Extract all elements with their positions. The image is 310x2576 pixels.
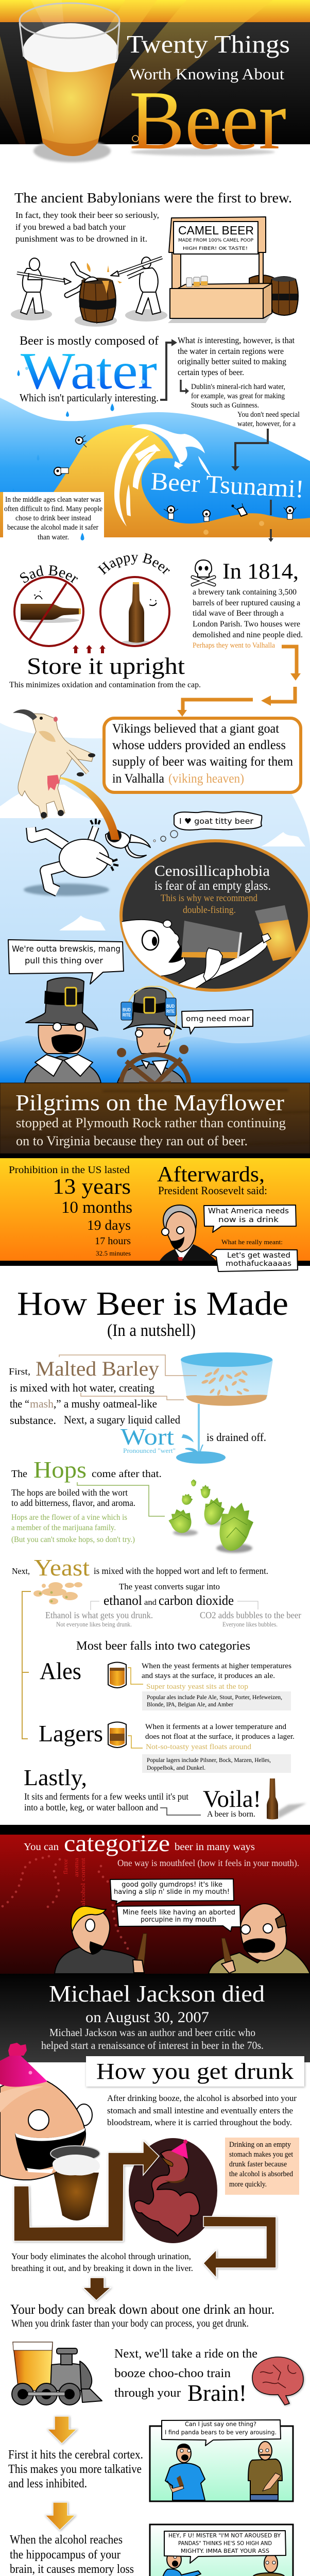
text: cerebral cortex: and less inhibited. xyxy=(8,2477,87,2490)
text: yeast intro: Yeast xyxy=(34,1554,90,1581)
icon: bottle xyxy=(267,1778,306,1820)
text block: Perhaps they went to Valhalla xyxy=(193,641,275,650)
icon: happy beer: Happy Beer xyxy=(98,553,170,575)
heading: You can xyxy=(24,1841,59,1853)
text: duration: 10 months xyxy=(61,1198,132,1217)
bald drinker xyxy=(209,1904,310,1974)
text: The xyxy=(11,1468,27,1480)
clouds xyxy=(0,785,305,930)
title: how beer is made xyxy=(17,1285,288,1340)
callout: empty stomach: Drinking on an empty xyxy=(229,2141,291,2149)
sign: CAMEL BEER xyxy=(178,224,254,237)
heading: categorize xyxy=(64,1830,170,1856)
text: duration: 17 hours xyxy=(95,1235,131,1247)
heading: ancient Babylonians: The ancient Babylonians were the first to brew. xyxy=(14,190,292,206)
callout: Vikings: in Valhalla xyxy=(112,772,164,786)
speech bubble xyxy=(211,1249,298,1272)
arrow xyxy=(181,380,189,394)
text: bloodstream, where it is carried throughout the body. xyxy=(107,2117,292,2127)
text xyxy=(9,1357,266,1454)
panel: Cenosillicaphobia xyxy=(116,841,309,992)
text block: Dublin: Stouts such as Guinness. xyxy=(191,401,259,410)
text xyxy=(11,2251,193,2273)
text: booze choo-choo train xyxy=(114,2367,231,2380)
text: Your body can break down about one drink an hour. xyxy=(10,2302,274,2317)
text: ethanol and CO2: Everyone likes bubbles. xyxy=(222,1620,278,1628)
header banner xyxy=(0,0,310,167)
text box: middle ages: than water. xyxy=(38,533,69,541)
wave foam xyxy=(114,424,211,527)
speech bubble: Can I just say one thing? xyxy=(185,2420,256,2428)
panel: booze train xyxy=(12,2342,303,2406)
swimmers xyxy=(54,435,296,521)
man in blue pointing xyxy=(160,2550,201,2576)
panel: lastly voila: It sits and ferments for a few weeks until it's put xyxy=(24,1791,188,1802)
panel: lastly voila: Lastly, xyxy=(24,1765,87,1790)
icon: skull xyxy=(193,560,214,585)
beer cans: RITE xyxy=(123,1012,131,1018)
callout: Vikings: (viking heaven) xyxy=(168,772,244,786)
rotated labels: aroma xyxy=(73,1857,80,1877)
ales: Super toasty yeast sits at the top xyxy=(146,1683,248,1691)
speech bubble: good golly gumdrops! it's like xyxy=(122,1880,222,1889)
speech bubble: moar xyxy=(182,1010,253,1034)
text: ethanol and CO2: and xyxy=(144,1598,157,1607)
panel: sky background xyxy=(0,709,310,1046)
text block: special water: You don't need special xyxy=(237,411,300,419)
text block: water regions: originally better suited to making xyxy=(178,357,286,366)
arrow: orange down xyxy=(45,2502,75,2530)
red arrows xyxy=(73,645,106,653)
text: After drinking booze, the alcohol is absorbed into your xyxy=(107,2093,297,2103)
icon: sad beer: Sad Beer xyxy=(20,565,78,583)
lagers: When it ferments at a lower temperature and xyxy=(145,1723,287,1731)
panel: categorize beer xyxy=(0,1825,310,1974)
ales xyxy=(40,1658,291,1710)
text: duration: 19 days xyxy=(87,1217,131,1233)
panel: Michael Jackson: on August 30, 2007 xyxy=(85,2009,209,2026)
speech bubble: mothafuckaaaas xyxy=(226,1260,291,1268)
text: mostly water: Beer is mostly composed of xyxy=(20,334,159,348)
text: ethanol and CO2: The yeast converts sugar into xyxy=(119,1582,220,1591)
text: yeast intro: Next, xyxy=(12,1566,30,1576)
text: come after that. xyxy=(92,1468,162,1480)
text: duration xyxy=(9,1164,132,1257)
text block: Dublin: for example, was great for making xyxy=(191,392,285,400)
text: yeast intro: is mixed with the hopped wort and left to ferment. xyxy=(94,1566,268,1576)
text xyxy=(107,2093,297,2127)
panel: Michael Jackson: Michael Jackson died xyxy=(49,1980,265,2007)
arrow xyxy=(231,429,268,471)
text: ethanol and CO2 xyxy=(45,1582,301,1628)
callout: empty stomach: the alcohol is absorbed xyxy=(229,2170,293,2178)
speech bubble: porcupine in my mouth xyxy=(141,1916,216,1924)
panel: Pilgrims on the Mayflower plank xyxy=(0,1083,310,1154)
lagers: Not-so-toasty yeast floats around xyxy=(146,1743,252,1751)
text: afterwards xyxy=(157,1163,267,1197)
text block: Dublin xyxy=(191,383,285,410)
panel: lastly voila: into a bottle, keg, or water balloon and xyxy=(24,1802,158,1812)
text: Next, a sugary liquid called xyxy=(64,1413,180,1426)
text xyxy=(10,2302,274,2329)
lagers: Lagers xyxy=(39,1720,103,1747)
text: (But you can't smoke hops, so don't try.) xyxy=(11,1535,135,1544)
illustration: drowning in a barrel xyxy=(11,257,167,327)
text block: London Parish. Two houses were xyxy=(193,620,300,629)
vat illustration xyxy=(176,1352,273,1464)
text: Malted Barley xyxy=(36,1357,159,1380)
text block xyxy=(193,588,303,650)
arrow: orange down xyxy=(47,2416,77,2444)
speech bubble: having a slip n' slide in my mouth! xyxy=(114,1888,230,1896)
heading: beer tsunami: Beer Tsunami! xyxy=(150,467,305,503)
dotted lines xyxy=(2,1855,129,1950)
text: mostly water: Water xyxy=(21,342,157,400)
arrow xyxy=(268,500,273,542)
beer cans: BUD xyxy=(123,1007,131,1012)
double-fisting drinker xyxy=(116,905,297,992)
speech bubble: I find panda bears to be very arousing. xyxy=(165,2429,277,2436)
text: The hops are boiled with the wort xyxy=(11,1487,128,1498)
panel: 1814 beer flood xyxy=(193,560,303,650)
text: ,” a mushy oatmeal-like xyxy=(54,1397,157,1410)
text: Hops xyxy=(33,1456,87,1483)
text: Wort xyxy=(120,1424,175,1450)
thought bubble: I ♥ goat titty beer xyxy=(179,817,254,826)
text box: middle ages: because the alcohol made it safer xyxy=(7,523,98,532)
speech bubble: HEY, F U! MISTER "I'M NOT AROUSED BY xyxy=(168,2533,281,2539)
heading: Store it upright xyxy=(27,653,185,679)
text: duration: 13 years xyxy=(53,1175,131,1199)
panel: lastly voila: Voila! xyxy=(203,1786,261,1812)
text: ethanol and CO2: ethanol xyxy=(104,1593,142,1608)
barrels xyxy=(249,275,298,315)
text box: middle ages xyxy=(3,492,104,541)
text: When you drink faster than your body can process, you get drunk. xyxy=(11,2318,249,2329)
lagers: does not float at the surface, it produces a lager. xyxy=(145,1733,295,1741)
blond drinker xyxy=(55,1906,147,1974)
text box: middle ages: often difficult to find. Many people xyxy=(4,505,102,513)
callout: empty stomach: stomach makes you get xyxy=(229,2150,294,2159)
text: hippocampus: brain, it causes memory loss xyxy=(10,2563,134,2576)
text block: special water: water, however, for a xyxy=(237,420,296,428)
text block: water regions: What is interesting, however, is that xyxy=(178,335,295,345)
speech bubble xyxy=(110,1879,234,1904)
speech bubble xyxy=(162,2420,281,2446)
rotated labels: alcohol content xyxy=(79,1857,87,1906)
heading xyxy=(24,1830,299,1869)
speech bubble xyxy=(164,2531,286,2563)
panel: Michael Jackson: Michael Jackson was an author and beer critic who xyxy=(49,2026,255,2039)
text: afterwards: President Roosevelt said: xyxy=(158,1184,267,1197)
speech bubble: now is a drink xyxy=(218,1216,279,1224)
text block: drowning punishment: if you brewed a bad batch your xyxy=(15,222,126,232)
text: through your xyxy=(114,2386,181,2400)
panel: prohibition xyxy=(0,1154,310,1272)
goat xyxy=(13,709,95,819)
title: Beer xyxy=(129,74,286,167)
viking xyxy=(24,819,150,896)
callout: empty stomach: drunk faster because xyxy=(229,2160,287,2168)
speech bubble: Let's get wasted xyxy=(227,1251,290,1260)
beer stream xyxy=(60,777,119,840)
text block: special water xyxy=(237,411,300,428)
panel: ocean and pilgrims xyxy=(0,939,310,1083)
text block: a brewery tank containing 3,500 xyxy=(193,588,297,597)
sign xyxy=(174,222,258,254)
panel: how you get drunk xyxy=(0,2043,304,2329)
sign: HIGH FIBER! OK TASTE! xyxy=(183,246,248,251)
ales: Ales xyxy=(40,1658,81,1685)
speech bubble: What America needs xyxy=(208,1207,289,1215)
text: ethanol and CO2: CO2 adds bubbles to the beer xyxy=(200,1610,301,1620)
title xyxy=(127,30,290,167)
callout: empty stomach: more quickly. xyxy=(229,2180,267,2189)
lagers: Doppelbok, and Dunkel. xyxy=(147,1764,205,1771)
icon: pint of beer xyxy=(20,3,119,162)
text block: drowning punishment: In fact, they took their beer so seriously, xyxy=(15,210,159,220)
icon: sad beer xyxy=(13,565,84,647)
text: cerebral cortex: This makes you more talkative xyxy=(8,2463,142,2476)
text: Hops are the flower of a vine which is xyxy=(11,1513,127,1522)
panel: malted barley step xyxy=(9,1352,273,1464)
text: Next, we'll take a ride on the xyxy=(114,2347,257,2361)
cups xyxy=(186,276,208,287)
text block: water regions: the water in certain regions were xyxy=(178,346,284,356)
panel: lastly voila xyxy=(24,1765,306,1820)
text: stomach and small intestine and eventually enters the xyxy=(107,2106,293,2115)
heading: beer in many ways xyxy=(175,1841,255,1853)
ales: Blonde, IPA, Belgian Ale, and Amber xyxy=(147,1701,233,1708)
callout: Vikings: supply of beer was waiting for them xyxy=(112,755,294,769)
text block: Dublin: Dublin's mineral-rich hard water, xyxy=(191,383,285,391)
panel: yeast step: Most beer falls into two categories xyxy=(76,1639,250,1653)
title: Twenty Things xyxy=(127,30,290,58)
callout: Vikings: Vikings believed that a giant goat xyxy=(112,722,279,736)
sign: MADE FROM 100% CAMEL POOP xyxy=(178,238,254,243)
water drops xyxy=(12,370,114,540)
panel: hops step xyxy=(11,1456,257,1555)
text: the “ xyxy=(10,1397,29,1410)
hop cones xyxy=(166,1479,257,1555)
callout: Vikings xyxy=(104,718,301,792)
Roosevelt xyxy=(160,1205,216,1261)
man in brown xyxy=(253,2554,286,2576)
callout: empty stomach xyxy=(225,2138,299,2195)
brown arrow xyxy=(203,2216,276,2278)
text: Pronounced "wert" xyxy=(123,1447,176,1454)
text block: water regions: certain types of beer. xyxy=(178,367,244,377)
man in blue xyxy=(165,2444,205,2500)
text xyxy=(11,1456,162,1544)
party hat xyxy=(0,2043,47,2087)
pilgrim 1 xyxy=(25,978,101,1083)
dark oval with stomach xyxy=(129,2138,217,2243)
icon: yeast cells xyxy=(33,1582,82,1604)
right guard xyxy=(111,257,167,321)
panel: yeast step xyxy=(12,1554,301,1773)
panel: beer tsunami wave background xyxy=(0,370,310,540)
drinker head xyxy=(0,2043,92,2180)
text: to add bitterness, flavor, and aroma. xyxy=(11,1498,135,1508)
text: This is why we recommend xyxy=(161,893,257,904)
thought bubble xyxy=(153,811,262,842)
text box: middle ages: chose to drink beer instead xyxy=(15,514,91,522)
text: ethanol and CO2: carbon dioxide xyxy=(159,1593,234,1608)
text: is fear of an empty glass. xyxy=(154,879,271,893)
title: Worth Knowing About xyxy=(129,65,284,83)
heading: One way is mouthfeel (how it feels in your mouth). xyxy=(117,1858,299,1869)
text: yeast intro xyxy=(12,1554,268,1581)
heading: This minimizes oxidation and contamination from the cap. xyxy=(9,681,201,689)
text: ethanol and CO2: Not everyone likes being drunk. xyxy=(56,1620,132,1628)
icon: ale glass xyxy=(108,1662,126,1688)
text: mash xyxy=(30,1397,54,1410)
icon: train xyxy=(12,2342,102,2405)
icon: brain xyxy=(252,2357,303,2405)
panel: Michael Jackson xyxy=(0,1974,310,2062)
speech bubble: moar: omg need moar xyxy=(186,1015,250,1023)
text block: barrels of beer ruptured causing a xyxy=(193,599,300,607)
ales: Popular ales include Pale Ale, Stout, Porter, Hefeweizen, xyxy=(147,1693,282,1701)
heading box: How you get drunk xyxy=(96,2059,294,2084)
text: a member of the marijuana family. xyxy=(11,1523,116,1532)
text block: tidal wave of Beer through a xyxy=(193,609,284,618)
ales: and stays at the surface, it produces an ale. xyxy=(142,1672,275,1680)
text xyxy=(154,862,271,916)
text block: demolished and nine people died. xyxy=(193,631,303,639)
text: substance. xyxy=(10,1414,56,1427)
lagers: Popular lagers include Pilsner, Bock, Marzen, Helles, xyxy=(147,1756,271,1764)
speech bubble xyxy=(117,1905,240,1931)
text: ethanol and CO2: Ethanol is what gets you drunk. xyxy=(45,1610,153,1620)
lagers xyxy=(39,1720,295,1773)
text: First, xyxy=(9,1366,30,1377)
text: hippocampus: the hippocampus of your xyxy=(10,2548,120,2562)
title: how beer is made: How Beer is Made xyxy=(17,1285,288,1323)
text: Brain! xyxy=(187,2380,247,2406)
icon: happy beer xyxy=(98,553,170,647)
speech bubble: captain: pull this thing over xyxy=(25,956,103,965)
text: duration: Prohibition in the US lasted xyxy=(9,1164,130,1176)
panel: 1814 beer flood: In 1814, xyxy=(222,560,299,584)
beer cans: BUD xyxy=(166,1004,175,1009)
speech bubble: Mine feels like having an aborted xyxy=(123,1908,235,1917)
ship wheel xyxy=(117,1045,192,1083)
speech bubble: MIGHTY. IMMA BEAT YOUR ASS xyxy=(181,2548,269,2554)
brown arrow xyxy=(14,2141,159,2241)
panel: Michael Jackson: helped start a renaissance of interest in beer in the 70s. xyxy=(41,2039,264,2052)
brown arrow xyxy=(83,2278,111,2300)
comic panel: angry xyxy=(150,2524,293,2576)
beer cans xyxy=(121,998,176,1020)
panel: prohibition: What he really meant: xyxy=(221,1238,283,1246)
panel: Pilgrims on the Mayflower plank: on to Virginia because they ran out of beer. xyxy=(16,1133,248,1148)
speech bubble xyxy=(204,1205,296,1232)
beer cans: RITE xyxy=(166,1009,175,1014)
panel: lastly voila: A beer is born. xyxy=(207,1810,255,1819)
panel: Pilgrims on the Mayflower plank: Pilgrims on the Mayflower xyxy=(15,1090,284,1115)
arrow: orange xyxy=(177,647,301,717)
text: duration: 32.5 minutes xyxy=(96,1249,131,1257)
text: breathing it out, and by breaking it down in the liver. xyxy=(11,2263,193,2273)
text block: drowning punishment: punishment was to be drowned in it. xyxy=(15,234,147,244)
left guard xyxy=(11,258,71,320)
text box: middle ages: In the middle ages clean water was xyxy=(5,496,101,504)
text: cerebral cortex xyxy=(8,2448,143,2490)
panel: store it upright xyxy=(9,553,201,689)
panel: Pilgrims on the Mayflower plank: stopped at Plymouth Rock rather than continuing xyxy=(16,1115,286,1130)
text: mostly water: Which isn't particularly interesting. xyxy=(20,392,159,404)
text: hippocampus: When the alcohol reaches xyxy=(10,2533,123,2547)
title: how beer is made: (In a nutshell) xyxy=(107,1321,196,1340)
pilgrim 2 with beer hat xyxy=(117,986,192,1083)
text block: drowning punishment xyxy=(15,210,159,244)
heading box xyxy=(86,2056,304,2087)
icon: lager glass xyxy=(108,1722,126,1748)
heading xyxy=(9,653,201,689)
illustration: camel beer stand xyxy=(168,217,298,323)
text: Cenosillicaphobia xyxy=(154,862,270,879)
callout: Vikings: whose udders provided an endless xyxy=(112,738,286,752)
rotated labels: flavor xyxy=(62,1859,69,1874)
speech bubble: captain: We're outta brewskis, mang xyxy=(12,944,120,954)
text: hippocampus xyxy=(10,2533,134,2576)
ales: When the yeast ferments at higher temperatures xyxy=(142,1662,291,1670)
text: double-fisting. xyxy=(183,905,236,916)
text: is drained off. xyxy=(206,1431,266,1444)
text: afterwards: Afterwards, xyxy=(157,1163,265,1187)
text xyxy=(114,2347,257,2406)
dark beer glass xyxy=(50,2146,100,2221)
speech bubble: PANDAS" THINKS HE'S SO HIGH AND xyxy=(178,2540,272,2547)
comic panel: pandas xyxy=(150,2420,293,2501)
barrel with man xyxy=(67,263,122,327)
text block: water regions xyxy=(178,335,295,377)
arrow xyxy=(160,339,177,400)
rotated labels xyxy=(62,1857,87,1906)
man in brown xyxy=(248,2442,282,2500)
text: is mixed with hot water, creating xyxy=(10,1381,154,1394)
text: cerebral cortex: First it hits the cerebral cortex. xyxy=(8,2448,143,2462)
speech bubble: captain xyxy=(8,940,124,984)
text: Your body eliminates the alcohol through urination, xyxy=(11,2251,191,2261)
